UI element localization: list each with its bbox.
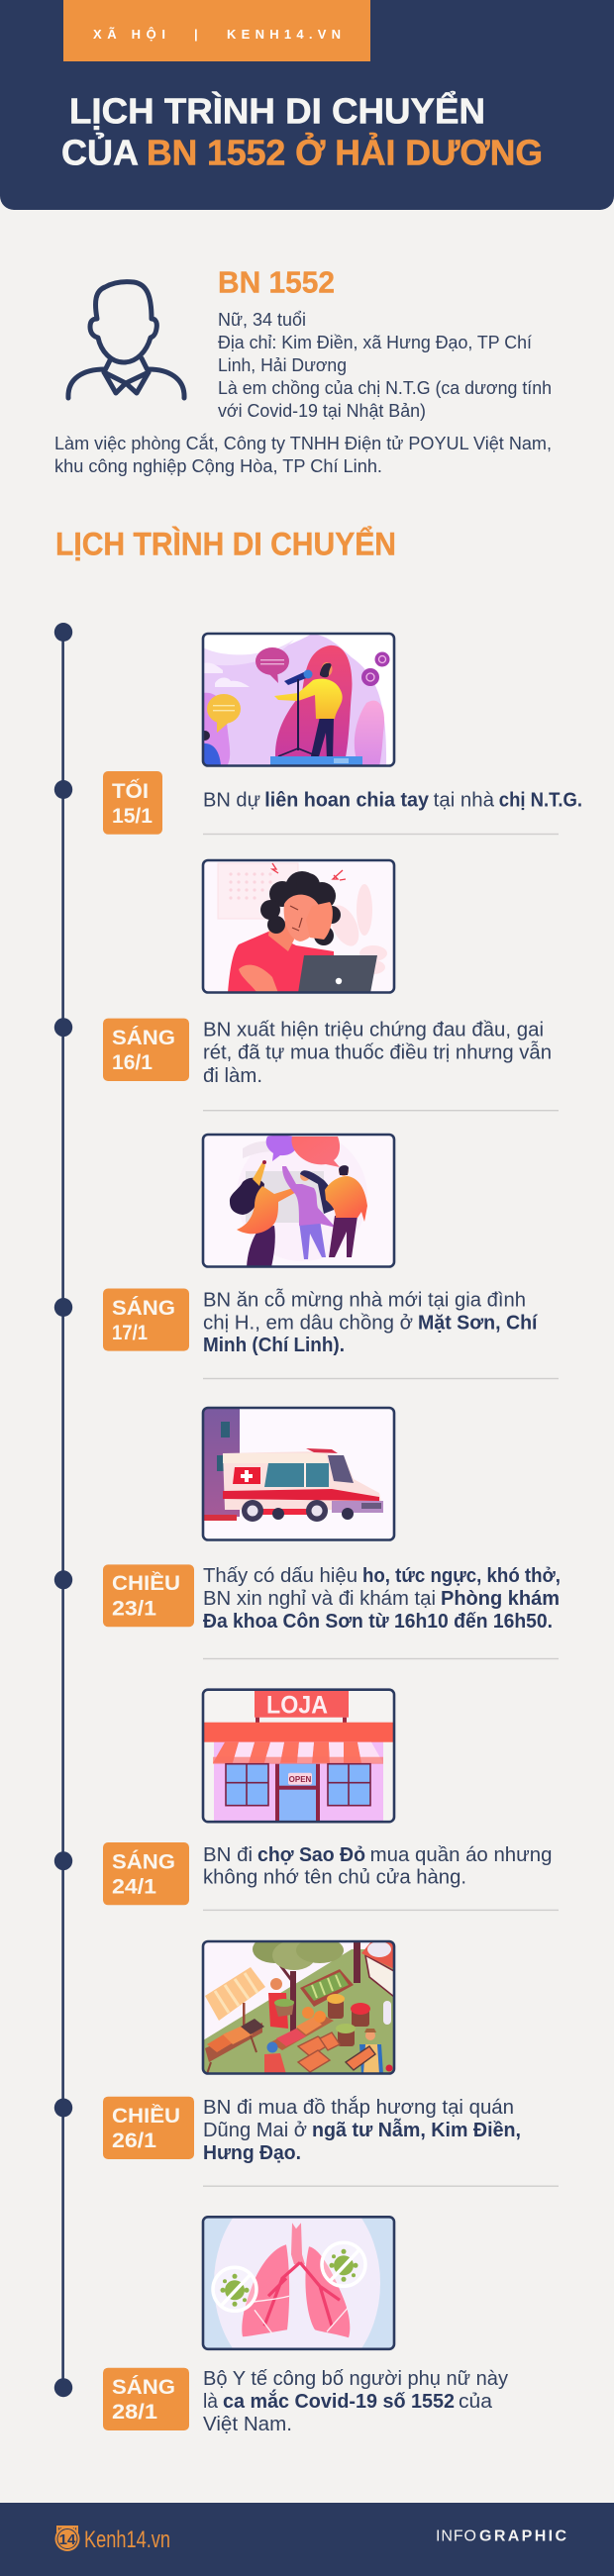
text: Chiều 26/1	[203, 2096, 521, 2164]
text: Chiều 23/1: Đa khoa Côn Sơn từ 16h10 đến 16h50.	[203, 1611, 553, 1633]
text: Sáng 24/1	[203, 1844, 553, 1889]
microphone	[278, 669, 318, 756]
text: Sáng 28/1: của	[459, 2391, 493, 2413]
badge: Sáng 16/1: 16/1	[112, 1051, 153, 1074]
timeline line and dots	[54, 623, 72, 2397]
text: Sáng 17/1: BN ăn cỗ mừng nhà mới tại gia đình	[203, 1288, 526, 1311]
badge: Sáng 24/1	[103, 1842, 189, 1905]
awning	[213, 1742, 383, 1764]
text: Sáng 16/1	[203, 1020, 552, 1087]
icon: person outline	[68, 282, 184, 398]
title: CỦA	[61, 131, 139, 172]
logo: Kenh14: KENH	[57, 2527, 77, 2533]
text: Sáng 17/1: chị H., em dâu chồng ở	[203, 1312, 413, 1334]
badge: Sáng 17/1: SÁNG	[112, 1297, 175, 1320]
logo: Kenh14: 14	[59, 2531, 76, 2548]
badge: Sáng 16/1	[103, 1019, 189, 1081]
text: Chiều 23/1: ho, tức ngực, khó thở,	[362, 1565, 561, 1587]
barrels	[327, 1994, 370, 2046]
virus right	[322, 2242, 365, 2286]
patient heading: BN 1552	[218, 265, 335, 299]
badge: Chiều 26/1: CHIỀU	[112, 2105, 180, 2128]
title: BN 1552 Ở HẢI DƯƠNG	[147, 131, 543, 172]
category tab: |	[194, 27, 198, 42]
text: Sáng 17/1: Minh (Chí Linh).	[203, 1335, 345, 1356]
category tab: XÃ HỘI	[93, 27, 165, 42]
text: Sáng 24/1: BN đi	[203, 1844, 253, 1866]
patient details: Địa chỉ: Kim Điền, xã Hưng Đạo, TP Chí	[218, 332, 533, 352]
ambulance body	[223, 1448, 383, 1522]
badge: Sáng 24/1: 24/1	[112, 1876, 156, 1899]
text: Chiều 26/1: ngã tư Nẫm, Kim Điền,	[312, 2118, 521, 2141]
label: infographic: GRAPHIC	[479, 2528, 566, 2544]
milk stall	[361, 1941, 394, 2071]
singer	[274, 662, 343, 764]
patient details	[54, 309, 552, 476]
text: Chiều 23/1: Thấy có dấu hiệu	[203, 1565, 358, 1587]
patient details: Linh, Hải Dương	[218, 354, 347, 375]
title	[61, 89, 543, 172]
badge: Chiều 23/1: 23/1	[112, 1598, 156, 1621]
text: Tối 15/1: chị N.T.G.	[499, 790, 582, 812]
text: Chiều 26/1: Hưng Đạo.	[203, 2142, 301, 2164]
badge: Sáng 17/1: 17/1	[112, 1322, 148, 1344]
label: infographic: INFO	[436, 2528, 476, 2544]
illustration: lungs with virus	[202, 2216, 396, 2350]
woman left	[230, 1160, 300, 1267]
watermelon crate	[300, 1969, 354, 2007]
patient details: Là em chồng của chị N.T.G (ca dương tính	[218, 377, 552, 398]
text: Sáng 28/1: Bộ Y tế công bố người phụ nữ này	[203, 2368, 508, 2390]
illustration: shop front	[203, 1690, 394, 1823]
woman middle	[282, 1166, 336, 1259]
stall centre	[270, 2007, 334, 2050]
crates	[298, 2032, 340, 2072]
logo: Kenh14: Kenh14.vn	[84, 2526, 170, 2553]
header banner	[0, 0, 614, 210]
trachea	[291, 2223, 305, 2264]
badge: Sáng 17/1	[103, 1289, 189, 1351]
text: Sáng 24/1: mua quần áo nhưng	[370, 1844, 553, 1866]
badge: Tối 15/1	[103, 771, 162, 835]
illustration: woman with headache	[203, 860, 394, 993]
text: Sáng 16/1: rét, đã tự mua thuốc điều trị nhưng vẫn	[203, 1041, 552, 1063]
text: Sáng 28/1: Việt Nam.	[203, 2414, 292, 2435]
badge: Sáng 28/1: 28/1	[112, 2401, 157, 2424]
badge: Chiều 23/1	[103, 1564, 194, 1627]
illustration: speaker with microphone	[200, 634, 394, 768]
patient details: với Covid-19 tại Nhật Bản)	[218, 400, 426, 421]
text: Sáng 24/1: không nhớ tên chủ cửa hàng.	[203, 1867, 466, 1889]
title: LỊCH TRÌNH DI CHUYỂN	[69, 89, 485, 131]
virus left	[213, 2267, 256, 2311]
text: Sáng 16/1: đi làm.	[203, 1065, 262, 1087]
footer	[0, 2503, 614, 2576]
illustration: group celebrating	[203, 1131, 394, 1267]
stage	[270, 756, 362, 764]
section heading: LỊCH TRÌNH DI CHUYỂN	[55, 527, 396, 562]
badge: Chiều 23/1: CHIỀU	[112, 1572, 180, 1595]
awning	[205, 1967, 265, 2031]
tree	[253, 1935, 360, 2032]
door	[275, 1764, 320, 1823]
badge: Chiều 26/1	[103, 2097, 194, 2159]
door: OPEN	[289, 1775, 312, 1784]
text: Sáng 28/1: ca mắc Covid-19 số 1552	[223, 2389, 455, 2413]
text: Chiều 23/1: BN xin nghỉ và đi khám tại	[203, 1588, 436, 1610]
category tab	[63, 0, 370, 61]
text: Tối 15/1: BN dự	[203, 790, 260, 812]
windows	[226, 1764, 370, 1806]
illustration: ambulance	[203, 1408, 394, 1540]
illustration: shop front: LOJA	[266, 1692, 328, 1720]
text: Tối 15/1: tại nhà	[434, 790, 495, 812]
logo: Kenh14	[55, 2526, 170, 2553]
text: Sáng 24/1: chợ Sao Đỏ	[257, 1844, 365, 1866]
text: Sáng 28/1: là	[203, 2391, 219, 2413]
badge: Sáng 28/1: SÁNG	[112, 2376, 175, 2399]
dividers	[203, 834, 559, 2187]
text: Chiều 26/1: Dũng Mai ở	[203, 2120, 307, 2141]
stall left	[205, 2019, 264, 2074]
badge: Tối 15/1: 15/1	[112, 805, 153, 828]
patient details: Làm việc phòng Cắt, Công ty TNHH Điện tử POYUL Việt Nam,	[54, 433, 552, 453]
vendor	[268, 1978, 294, 2029]
illustration: outdoor market	[203, 1935, 394, 2074]
lungs	[242, 2244, 289, 2336]
text: Chiều 23/1: Phòng khám	[441, 1588, 560, 1610]
text: Sáng 16/1: BN xuất hiện triệu chứng đau đầu, gai	[203, 1020, 544, 1041]
text: Sáng 17/1: Mặt Sơn, Chí	[418, 1312, 539, 1334]
text: Sáng 28/1	[203, 2368, 508, 2435]
text: Chiều 26/1: BN đi mua đồ thắp hương tại quán	[203, 2096, 514, 2119]
patient details: Nữ, 34 tuổi	[218, 309, 306, 330]
category tab: KENH14.VN	[227, 27, 341, 42]
badge: Sáng 24/1: SÁNG	[112, 1851, 175, 1874]
text: Tối 15/1: liên hoan chia tay	[264, 790, 430, 812]
text: Sáng 17/1	[203, 1288, 539, 1356]
man right	[325, 1165, 367, 1257]
badge: Chiều 26/1: 26/1	[112, 2130, 156, 2152]
audience	[204, 731, 221, 764]
badge: Tối 15/1: TỐI	[112, 779, 149, 803]
patient details: khu công nghiệp Cộng Hòa, TP Chí Linh.	[54, 455, 382, 476]
badge: Sáng 28/1	[103, 2368, 189, 2430]
text: Chiều 23/1	[203, 1565, 561, 1633]
badge: Sáng 16/1: SÁNG	[112, 1027, 175, 1049]
shoppers	[264, 2029, 383, 2074]
